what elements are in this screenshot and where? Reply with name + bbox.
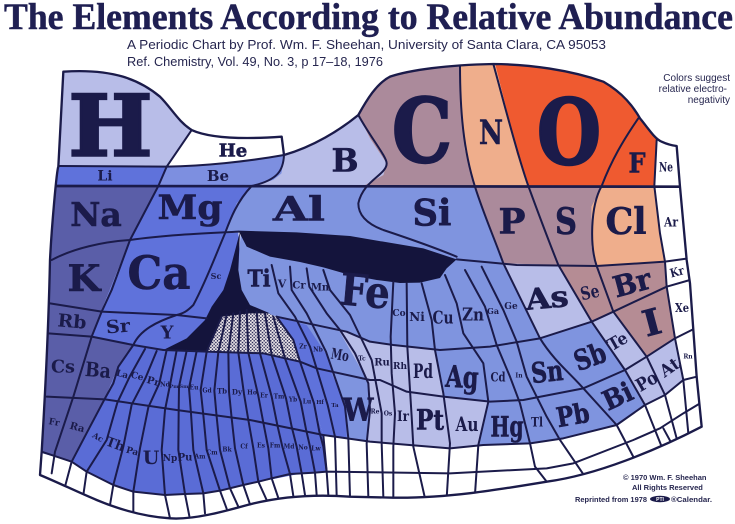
region: O and F orange cells <box>496 65 656 186</box>
element symbols: lanthanide series <box>115 369 312 406</box>
copyright block <box>575 473 712 504</box>
element symbols: sixth row: Bi <box>598 377 638 417</box>
legend note: colors suggest electronegativity: relative electro- <box>659 84 727 95</box>
element symbols: sixth row: At <box>655 354 684 382</box>
element symbols: fifth row: Sb <box>569 336 611 378</box>
element symbols: third row <box>70 188 678 243</box>
region: Mg, Ca, Sr, Y, Sc royal blue <box>92 187 252 350</box>
element symbols: first and second rows: B <box>331 142 359 180</box>
region: lightest lavender cells H, B <box>60 72 386 185</box>
element symbols: sixth row: Cs <box>51 356 75 378</box>
element symbols: francium, radium, actinide series: Am <box>193 454 206 460</box>
element symbols: first and second rows: Li <box>97 168 113 184</box>
region: fifth period medium blue <box>310 322 644 444</box>
copyright block: PTI <box>656 497 664 503</box>
element symbols: lanthanide series: Yb <box>288 396 297 404</box>
element symbols: sixth row <box>51 354 693 444</box>
element symbols: lanthanide series: Sm <box>180 384 189 390</box>
element symbols: first and second rows: Ne <box>659 160 673 176</box>
element symbols: lanthanide series: Nd <box>160 382 171 388</box>
element symbols: third row: Mg <box>158 188 222 228</box>
element symbols: fourth row: Br <box>609 261 655 304</box>
black spike <box>163 232 270 351</box>
element symbols: fourth row: Zn <box>462 304 484 326</box>
subtitle: source lines: Ref. Chemistry, Vol. 49, No. 3, p 17–18, 1976 <box>127 54 383 69</box>
element symbols: lanthanide series: Lu <box>303 398 312 406</box>
clipped colour regions and grid <box>37 57 700 518</box>
element symbols: third row: P <box>498 202 526 242</box>
element symbols: sixth row: W <box>342 391 374 429</box>
element symbols: fifth row: Cd <box>490 370 506 386</box>
region: C, P, S mauve cells <box>358 57 602 266</box>
element symbols: francium, radium, actinide series: Np <box>163 454 177 464</box>
black transition-metal blob <box>238 231 457 283</box>
element symbols: sixth row: Ta <box>331 403 339 409</box>
element symbols: fifth row: Te <box>604 328 632 356</box>
element symbols: francium, radium, actinide series: Ac <box>90 429 105 444</box>
element symbols: fifth row: Ru <box>374 358 390 368</box>
element symbols: lanthanide series: Ho <box>247 390 257 396</box>
stippled wedge <box>208 313 298 360</box>
element symbols: third row: S <box>555 201 577 243</box>
element symbols: fourth row: As <box>523 279 570 317</box>
element symbols: fourth row: Se <box>579 281 601 305</box>
element symbols: francium, radium, actinide series: No <box>298 444 308 452</box>
element symbols: first and second rows: F <box>628 148 646 180</box>
element symbols: first and second rows: O <box>537 80 601 186</box>
region: N and Cl peach cells <box>460 57 665 266</box>
element symbols: lanthanide series: Pr <box>145 375 161 389</box>
element symbols: francium, radium, actinide series: Lw <box>311 446 322 452</box>
element symbols: fifth row: Rh <box>393 362 407 372</box>
element symbols: sixth row: Tl <box>531 416 543 430</box>
region: Al, Si medium blue <box>225 186 540 353</box>
element symbols: lanthanide series: Dy <box>232 388 243 396</box>
chart outline stroke <box>40 64 702 519</box>
element symbols: fourth row: Cr <box>292 280 306 292</box>
element symbols: lanthanide series: Tm <box>274 394 285 400</box>
element symbols: lanthanide series: Eu <box>190 384 199 392</box>
element symbols: fourth row: K <box>68 258 102 300</box>
subtitle: source lines <box>127 37 606 69</box>
element symbols: sixth row: Au <box>455 412 478 436</box>
subtitle: source lines: A Periodic Chart by Prof. Wm. F. Sheehan, University of Santa Clara, CA 95053 <box>127 37 606 52</box>
copyright block: Reprinted from 1978 <box>575 495 647 504</box>
region: alkali dark blue column <box>37 187 158 462</box>
region: Li and Be band <box>57 156 283 185</box>
region: Re to Au lavender <box>367 380 488 448</box>
legend note: colors suggest electronegativity <box>659 73 730 106</box>
element symbols: lanthanide series: La <box>115 369 129 381</box>
element symbols: fourth row: Cu <box>432 308 454 328</box>
element symbols: fifth row <box>57 300 689 396</box>
element symbols: fourth row: Fe <box>338 264 392 320</box>
element symbols: francium, radium, actinide series: U <box>143 447 160 469</box>
element symbols: third row: Na <box>70 195 122 234</box>
element symbols: sixth row: Os <box>384 410 393 418</box>
element symbols: fourth row: Sc <box>211 271 221 281</box>
element symbols: fifth row: Tc <box>358 356 366 362</box>
element symbols: sixth row: Pb <box>554 398 592 434</box>
element symbols: fifth row: Mo <box>330 345 350 365</box>
element symbols: first and second rows: H <box>68 76 152 176</box>
region: lanthanide and actinide fan <box>72 345 327 495</box>
element symbols: fifth row: Xe <box>675 301 689 315</box>
element symbols: lanthanide series: Ce <box>129 371 145 384</box>
element symbols: lanthanide series: Pm <box>169 384 179 390</box>
element symbols: fifth row: Ag <box>444 360 479 396</box>
element symbols: sixth row: Pt <box>416 404 444 436</box>
legend note: colors suggest electronegativity: negativity <box>688 95 730 106</box>
element symbols: francium, radium, actinide series: Pa <box>125 446 139 458</box>
copyright block: © 1970 Wm. F. Sheehan <box>623 473 707 482</box>
element symbols: first and second rows: He <box>219 140 247 162</box>
element symbols: third row: Al <box>272 190 325 230</box>
element symbols: francium, radium, actinide series: Cf <box>240 444 248 450</box>
element symbols: fourth row: Co <box>392 309 406 319</box>
element symbols: fifth row: Sr <box>105 315 131 339</box>
element symbols: fourth row: Ca <box>128 246 190 300</box>
element symbols: fifth row: Pd <box>413 359 433 383</box>
region: As lavender <box>503 263 592 338</box>
element symbols: sixth row: Hf <box>316 400 324 406</box>
element symbols: fifth row: Zr <box>299 344 308 350</box>
element symbols: sixth row: Po <box>632 367 662 397</box>
element symbols: first and second rows: Be <box>207 167 229 185</box>
element symbols: third row: Si <box>412 192 452 234</box>
region: Se, Br, I mauve <box>558 262 675 357</box>
element symbols: fifth row: Sn <box>529 354 565 390</box>
element symbols: sixth row: Ba <box>84 357 112 383</box>
element symbols: fifth row: In <box>515 372 523 380</box>
copyright block: All Rights Reserved <box>632 483 703 492</box>
element symbols: francium, radium, actinide series: Fr <box>48 417 61 429</box>
element symbols: fifth row: Y <box>160 322 175 344</box>
element symbols: fourth row: Ga <box>487 306 499 316</box>
element symbols: fourth row <box>68 246 686 328</box>
element symbols: lanthanide series: Gd <box>202 388 212 394</box>
element symbols: fourth row: Ti <box>248 266 271 292</box>
element symbols: francium, radium, actinide series: Md <box>284 444 295 450</box>
element symbols: sixth row: Rn <box>683 354 693 360</box>
element symbols: francium, radium, actinide series: Pu <box>178 452 192 464</box>
region: Tc to Pd lavender <box>338 329 443 396</box>
element symbols: sixth row: Re <box>371 408 380 416</box>
element symbols: francium, radium, actinide series: Bk <box>222 446 232 454</box>
element symbols: fourth row: Ge <box>504 302 518 312</box>
element symbols: third row: Cl <box>606 201 646 243</box>
element symbols: third row: Ar <box>663 216 678 230</box>
element symbols: francium, radium, actinide series <box>48 417 322 469</box>
legend note: colors suggest electronegativity: Colors suggest <box>663 73 730 84</box>
copyright block: ®Calendar. <box>671 495 712 504</box>
element symbols: fifth row: Rb <box>57 310 87 334</box>
element symbols: sixth row: Ir <box>397 409 410 425</box>
element symbols: fourth row: Mn <box>311 282 330 294</box>
region: Te, Po, At lavender <box>592 312 683 405</box>
element symbols: francium, radium, actinide series: Es <box>257 442 266 450</box>
element symbols: francium, radium, actinide series: Ra <box>68 421 86 435</box>
element symbols: fifth row: I <box>638 300 666 346</box>
element symbols: first and second rows: N <box>479 113 503 153</box>
region: Zr, Nb, Hf, Ta royal blue <box>277 317 347 438</box>
chart outline base <box>40 64 702 519</box>
lanthanide and actinide fan lines <box>65 310 328 518</box>
element symbols: sixth row: Hg <box>490 410 524 444</box>
element symbols: francium, radium, actinide series: Fm <box>270 442 281 450</box>
element symbols: fourth row: Kr <box>668 263 686 281</box>
element symbols: francium, radium, actinide series: Cm <box>206 450 218 456</box>
periodic chart: warped shapes and grid <box>37 57 702 519</box>
grid lines <box>42 64 700 498</box>
element symbols: lanthanide series: Er <box>260 392 269 400</box>
element symbols: francium, radium, actinide series: Th <box>103 435 127 456</box>
element symbols: lanthanide series: Tb <box>217 386 227 396</box>
element symbols: first and second rows: C <box>392 79 452 183</box>
element symbols: fifth row: Nb <box>313 346 323 354</box>
element symbols: fourth row: V <box>277 278 287 290</box>
element symbols: first and second rows <box>68 76 673 186</box>
element symbols: fourth row: Ni <box>409 310 425 324</box>
